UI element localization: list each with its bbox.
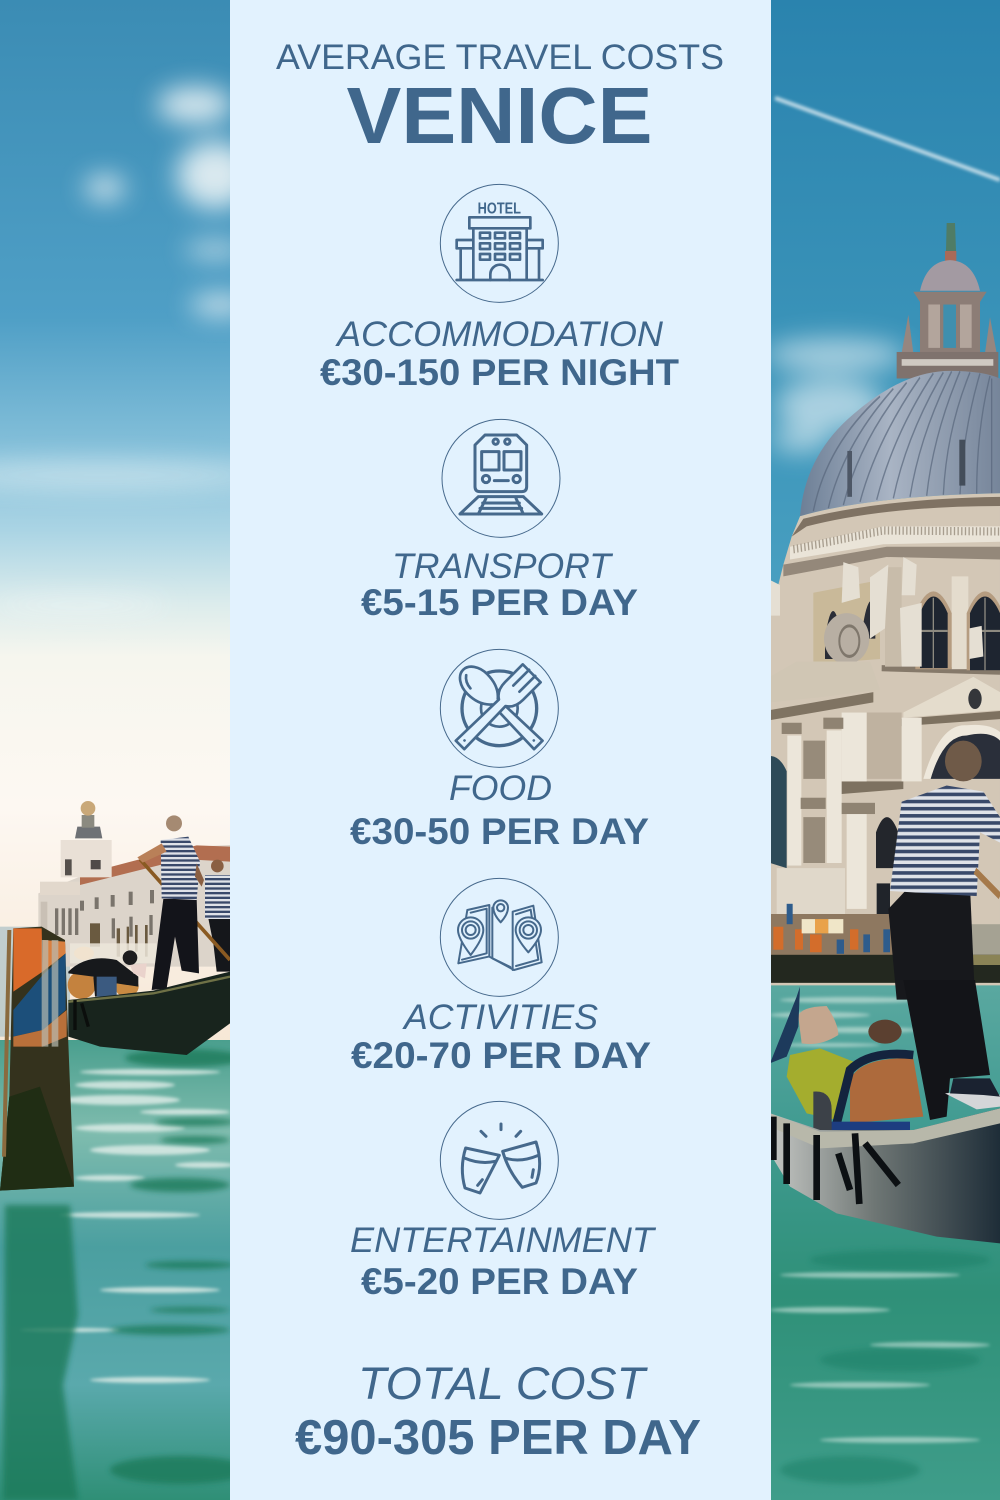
- label: accommodation: [320, 315, 679, 393]
- passengers and seats: [68, 974, 94, 999]
- contrail: [775, 98, 1000, 180]
- windows: [915, 591, 952, 669]
- second gondolier: [205, 860, 230, 972]
- label: food: FOOD: [449, 769, 552, 808]
- title: VENICE: [346, 71, 652, 160]
- columns: [787, 713, 922, 909]
- label: activities: ACTIVITIES: [402, 998, 598, 1037]
- gondolier legs: [903, 980, 1000, 1120]
- icon: train: [442, 419, 560, 537]
- label: transport: €5-15 PER DAY: [361, 582, 638, 623]
- dome: [800, 371, 1000, 516]
- icon: clinking glasses: [440, 1101, 558, 1219]
- crowd on quay: [771, 914, 892, 955]
- basilica walls: [770, 493, 1000, 985]
- main gondolier upper body: [888, 741, 1000, 1000]
- main gondolier: [137, 815, 204, 990]
- icon: hotel: [440, 184, 558, 302]
- statues and scroll: [824, 613, 869, 664]
- total cost: TOTAL COST: [358, 1358, 649, 1409]
- total cost: €90-305 PER DAY: [295, 1411, 701, 1465]
- hazy far shore: [0, 927, 70, 1037]
- center panel: [230, 0, 771, 1500]
- entablature: [814, 662, 856, 664]
- oar: [140, 859, 230, 960]
- gondola hull: [770, 1108, 1000, 1243]
- customs house building: [38, 845, 230, 967]
- label: accommodation: €30-150 PER NIGHT: [320, 352, 679, 393]
- photo: left gondola scene: [0, 0, 230, 1500]
- gondola hull: [68, 972, 230, 1055]
- icon: plate with fork and spoon: [440, 649, 558, 767]
- passenger in green jacket: [770, 987, 853, 1120]
- label: activities: €20-70 PER DAY: [351, 1035, 651, 1076]
- label: food: [350, 769, 649, 852]
- icon: hotel: HOTEL: [478, 200, 521, 217]
- label: food: €30-50 PER DAY: [350, 811, 649, 852]
- label: entertainment: ENTERTAINMENT: [350, 1221, 657, 1260]
- mooring post: [0, 927, 74, 1191]
- icon: map with pins: [440, 878, 558, 996]
- label: accommodation: ACCOMMODATION: [335, 315, 664, 354]
- total cost: [295, 1358, 701, 1465]
- lantern on dome: [897, 223, 998, 378]
- seat: [830, 1020, 923, 1130]
- label: entertainment: [350, 1221, 657, 1302]
- label: entertainment: €5-20 PER DAY: [361, 1261, 638, 1302]
- label: transport: TRANSPORT: [392, 547, 614, 586]
- photo: right basilica scene: [765, 0, 1000, 1500]
- title: [276, 38, 724, 160]
- label: activities: [351, 998, 651, 1076]
- pilings: [90, 923, 148, 957]
- label: transport: [361, 547, 638, 623]
- title: AVERAGE TRAVEL COSTS: [276, 38, 724, 77]
